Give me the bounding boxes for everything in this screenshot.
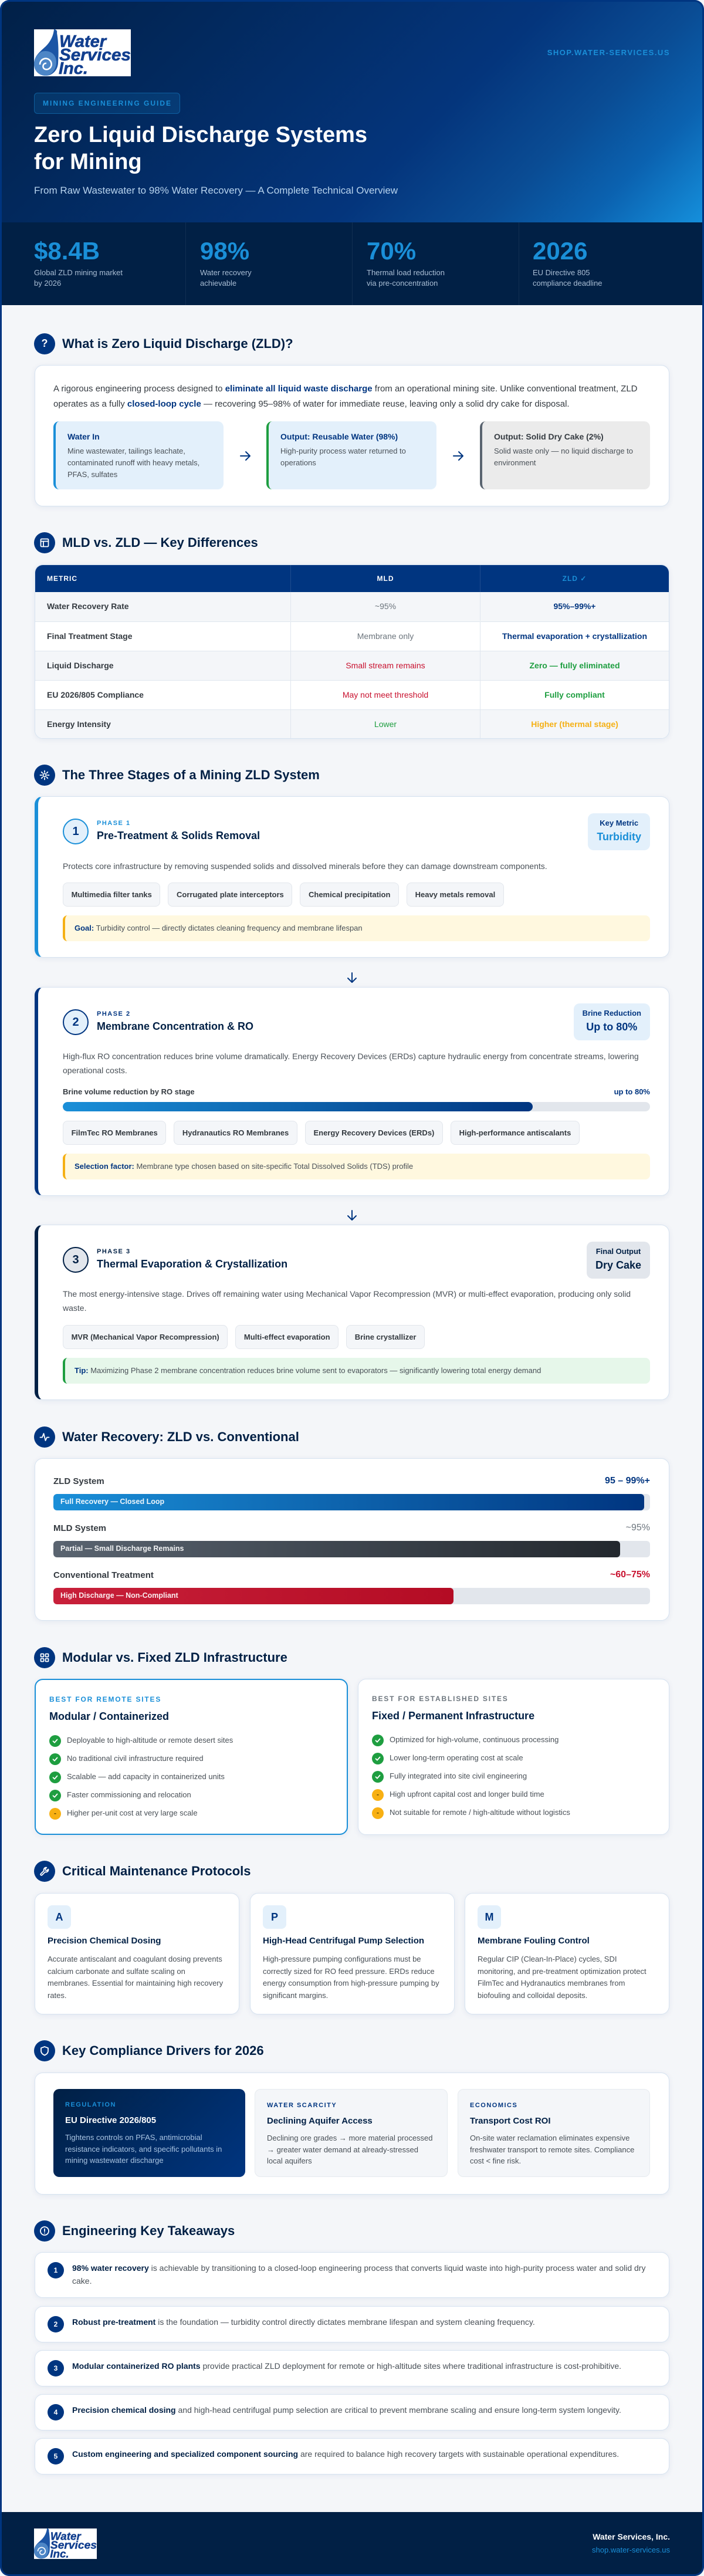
component chips: Multimedia filter tanks	[72, 890, 152, 899]
component chips: FilmTec RO Membranes	[72, 1128, 158, 1137]
key metric	[574, 1003, 650, 1040]
title: Fixed / Permanent Infrastructure	[372, 1710, 534, 1722]
flow: water in: contaminated runoff with heavy metals,	[67, 458, 199, 467]
component chips: Heavy metals removal	[415, 890, 495, 899]
phase label: PHASE 2	[97, 1010, 131, 1017]
footer logo: Water	[50, 2530, 82, 2543]
heading: modular vs fixed: Modular vs. Fixed ZLD Infrastructure	[62, 1650, 287, 1665]
letter badge	[478, 1905, 501, 1929]
row: treatment: Membrane only	[357, 631, 414, 641]
icon: grid	[34, 1647, 55, 1668]
item: Deployable to high-altitude or remote desert sites	[67, 1736, 233, 1745]
takeaway 2: 2	[54, 2320, 57, 2328]
item: Higher per-unit cost at very large scale	[67, 1808, 198, 1817]
component chips: Corrugated plate interceptors	[177, 890, 284, 899]
item	[49, 1735, 233, 1747]
body: membranes. Essential for maintaining high recovery	[48, 1979, 223, 1987]
label: BEST FOR ESTABLISHED SITES	[372, 1695, 509, 1703]
label: BEST FOR REMOTE SITES	[49, 1695, 161, 1703]
goal note: Goal: Turbidity control — directly dictates cleaning frequency and membrane lifespan	[75, 924, 363, 932]
item: Not suitable for remote / high-altitude without logistics	[390, 1808, 570, 1817]
table header: ZLD ✓	[563, 574, 587, 583]
item	[372, 1789, 544, 1801]
driver: scarcity: Declining ore grades → more material processed	[267, 2134, 433, 2142]
site link: SHOP.WATER-SERVICES.US	[547, 48, 670, 57]
row: treatment: Thermal evaporation + crystallization	[502, 631, 647, 641]
icon: shield	[34, 2040, 55, 2061]
selection note	[63, 1154, 650, 1179]
body: monitoring, and pre-treatment optimization protect	[478, 1967, 647, 1976]
row: energy: Energy Intensity	[47, 719, 111, 729]
footer logo	[34, 2528, 97, 2559]
item	[49, 1790, 191, 1801]
item: Fully integrated into site civil engineering	[390, 1772, 527, 1780]
bar: conventional: Conventional Treatment	[53, 1570, 154, 1580]
item	[49, 1753, 204, 1765]
body	[263, 1955, 439, 2000]
key metric: Up to 80%	[586, 1021, 637, 1033]
heading: modular vs fixed	[34, 1647, 287, 1668]
phase number	[63, 1247, 89, 1273]
description	[63, 1289, 631, 1313]
phase title: Thermal Evaporation & Crystallization	[97, 1258, 287, 1270]
letter badge: P	[271, 1911, 278, 1923]
arrow down	[347, 1210, 357, 1221]
goal note	[63, 915, 650, 941]
driver: economics: ECONOMICS	[470, 2102, 517, 2109]
flow: dry cake: Solid waste only — no liquid discharge to	[494, 447, 633, 455]
description: High-flux RO concentration reduces brine volume dramatically. Energy Recovery Devices (ERDs) capture hydraulic energy from concentrate streams, lowering	[63, 1052, 639, 1061]
row: compliance: May not meet threshold	[343, 690, 428, 699]
component chips: High-performance antiscalants	[459, 1128, 571, 1137]
bar: conventional	[53, 1570, 650, 1604]
component chips: Hydranautics RO Membranes	[182, 1128, 289, 1137]
stat: recovery: 98%	[200, 237, 249, 265]
takeaway 1: 1	[54, 2266, 57, 2274]
heading: maintenance: Critical Maintenance Protocols	[62, 1864, 251, 1878]
bar: ZLD	[53, 1476, 650, 1510]
row: treatment: Final Treatment Stage	[47, 631, 132, 641]
component chips: MVR (Mechanical Vapor Recompression)	[72, 1333, 219, 1341]
component chips: Chemical precipitation	[309, 890, 390, 899]
flow: reusable water: operations	[280, 458, 316, 467]
item: Faster commissioning and relocation	[67, 1790, 191, 1799]
panel: compliance drivers	[35, 2073, 669, 2195]
progress label: Brine volume reduction by RO stage	[63, 1087, 195, 1096]
row: treatment	[35, 621, 669, 651]
key metric	[588, 813, 650, 850]
panel: modular	[35, 1679, 348, 1835]
row: discharge	[35, 651, 669, 680]
letter badge	[48, 1905, 71, 1929]
stat: market	[34, 237, 123, 288]
flow: reusable water	[266, 421, 436, 489]
panel: pump selection	[250, 1893, 455, 2014]
item	[49, 1772, 225, 1783]
takeaway 3: Modular containerized RO plants provide practical ZLD deployment for remote or high-altitude sites where traditional infrastructure is cost-prohibitive.	[72, 2361, 621, 2371]
stat: directive: 2026	[533, 237, 587, 265]
driver: regulation: EU Directive 2026/805	[65, 2115, 156, 2125]
description	[63, 1052, 639, 1075]
heading: what is ZLD: What is Zero Liquid Discharge (ZLD)?	[62, 336, 293, 351]
body	[48, 1955, 223, 2000]
row: recovery: 95%–99%+	[553, 601, 596, 611]
panel: chemical dosing	[35, 1893, 239, 2014]
tip note: Tip: Maximizing Phase 2 membrane concentration reduces brine volume sent to evaporators — significantly lowering total energy demand	[75, 1366, 541, 1375]
phase label: PHASE 1	[97, 820, 131, 827]
progress bar	[63, 1102, 650, 1111]
title: for Mining	[34, 150, 142, 174]
footer link: shop.water-services.us	[592, 2545, 670, 2554]
heading: compliance	[34, 2040, 264, 2061]
heading: takeaways	[34, 2220, 235, 2242]
row: discharge: Liquid Discharge	[47, 661, 114, 670]
bar: ZLD: ZLD System	[53, 1476, 104, 1486]
intro text: operates as a fully closed-loop cycle — recovering 95–98% of water for immediate reuse, leaving only a solid dry cake for disposal.	[53, 399, 570, 409]
panel: phase 3	[35, 1225, 669, 1400]
table header	[35, 565, 669, 592]
item: -	[54, 1809, 56, 1817]
phase number	[63, 819, 89, 844]
icon: wrench	[34, 1861, 55, 1882]
stat: market: $8.4B	[34, 237, 100, 265]
flow: dry cake: environment	[494, 458, 536, 467]
panel: fixed	[358, 1679, 669, 1835]
takeaway 5	[35, 2438, 669, 2474]
driver: regulation: Tightens controls on PFAS, antimicrobial	[65, 2133, 202, 2142]
flow: water in: Water In	[67, 432, 100, 441]
stat: thermal: Thermal load reduction	[367, 268, 445, 277]
logo: Services	[59, 46, 131, 65]
heading: three stages	[34, 765, 320, 786]
stat: recovery: Water recovery	[200, 268, 252, 277]
heading: water recovery	[34, 1426, 299, 1448]
key metric: Brine Reduction	[583, 1009, 641, 1017]
driver: scarcity: WATER SCARCITY	[267, 2102, 337, 2109]
icon: gear	[34, 765, 55, 786]
bar: conventional: High Discharge — Non-Compliant	[60, 1591, 178, 1600]
description: The most energy-intensive stage. Drives off remaining water using Mechanical Vapor Recompression (MVR) or multi-effect evaporation, producing only solid	[63, 1289, 631, 1299]
body: High-pressure pumping configurations must be	[263, 1955, 421, 1963]
selection note: Selection factor: Membrane type chosen based on site-specific Total Dissolved Solids (TDS) profile	[75, 1162, 413, 1171]
heading: what is ZLD	[34, 333, 293, 354]
flow: water in: Mine wastewater, tailings leachate,	[67, 447, 185, 455]
description: Protects core infrastructure by removing suspended solids and dissolved minerals before they can damage downstream components.	[63, 861, 547, 871]
phase number	[63, 1009, 89, 1035]
tip note	[63, 1358, 650, 1384]
letter badge	[263, 1905, 286, 1929]
driver: scarcity	[255, 2089, 448, 2177]
stat: directive	[533, 237, 603, 288]
takeaway 3	[35, 2350, 669, 2386]
takeaway 4: Precision chemical dosing and high-head centrifugal pump selection are critical to prevent membrane scaling and ensure long-term system longevity.	[72, 2405, 621, 2415]
icon: question mark	[34, 333, 55, 354]
table header: METRIC	[47, 574, 77, 583]
row: energy: Lower	[374, 719, 397, 729]
takeaway 3: 3	[54, 2364, 57, 2372]
comparison table	[35, 564, 669, 739]
panel: ZLD definition	[35, 365, 669, 506]
phase title: Membrane Concentration & RO	[97, 1020, 253, 1032]
panel: phase 2	[35, 987, 669, 1196]
panel: recovery bars	[35, 1458, 669, 1621]
description: operational costs.	[63, 1066, 127, 1075]
icon: alert circle	[34, 2220, 55, 2242]
logo: Water	[59, 32, 107, 51]
title: High-Head Centrifugal Pump Selection	[263, 1936, 424, 1946]
phase number: 2	[72, 1016, 79, 1029]
takeaway 4: 4	[54, 2408, 57, 2416]
driver: regulation	[53, 2089, 245, 2177]
item: No traditional civil infrastructure required	[67, 1754, 204, 1763]
item	[372, 1753, 523, 1764]
driver: scarcity: → greater water demand at already-stressed	[267, 2145, 418, 2154]
takeaway 2	[35, 2306, 669, 2342]
driver: regulation: mining wastewater discharge	[65, 2156, 164, 2165]
key metric: Final Output	[596, 1247, 641, 1256]
row: recovery: Water Recovery Rate	[47, 601, 129, 611]
heading: compliance: Key Compliance Drivers for 2026	[62, 2043, 264, 2058]
title: Membrane Fouling Control	[478, 1936, 590, 1946]
item: Lower long-term operating cost at scale	[390, 1753, 523, 1762]
takeaway 1: 98% water recovery is achievable by transitioning to a closed-loop engineering process that converts liquid waste into high-purity process water and solid dry	[72, 2263, 645, 2273]
driver: scarcity: Declining Aquifer Access	[267, 2116, 373, 2126]
body	[478, 1955, 647, 2000]
component chips	[63, 1325, 425, 1349]
phase label: PHASE 3	[97, 1248, 131, 1255]
stats bar	[0, 222, 704, 305]
logo	[34, 29, 131, 76]
intro text: A rigorous engineering process designed to eliminate all liquid waste discharge from an operational mining site. Unlike conventional treatment, ZLD	[53, 384, 638, 394]
bar: ZLD: 95 – 99%+	[605, 1476, 650, 1486]
takeaway 5: 5	[54, 2452, 57, 2460]
heading: takeaways: Engineering Key Takeaways	[62, 2223, 235, 2238]
phase title: Pre-Treatment & Solids Removal	[97, 830, 260, 841]
stat: recovery	[200, 237, 252, 288]
driver: regulation: resistance indicators, and specific pollutants in	[65, 2145, 222, 2154]
driver: regulation: REGULATION	[65, 2101, 116, 2108]
driver: economics: cost < fine risk.	[470, 2156, 521, 2165]
row: recovery: ~95%	[375, 601, 396, 611]
takeaway 4	[35, 2394, 669, 2430]
body: rates.	[48, 1991, 67, 2000]
footer logo: Services	[50, 2538, 97, 2551]
row: compliance	[35, 680, 669, 709]
component chips: Energy Recovery Devices (ERDs)	[313, 1128, 434, 1137]
phase number: 1	[72, 825, 79, 838]
body: significant margins.	[263, 1991, 328, 2000]
flow: reusable water: High-purity process water returned to	[280, 447, 406, 455]
item	[372, 1807, 570, 1819]
takeaway 1	[35, 2252, 669, 2298]
component chips: Multi-effect evaporation	[244, 1333, 330, 1341]
row: energy: Higher (thermal stage)	[531, 719, 618, 729]
takeaway 1: cake.	[72, 2276, 92, 2286]
icon: table	[34, 532, 55, 553]
key metric	[587, 1242, 650, 1279]
component chips	[63, 1121, 580, 1145]
bar: conventional: ~60–75%	[610, 1570, 650, 1580]
stat: thermal: via pre-concentration	[367, 279, 438, 288]
body: calcium carbonate and sulfate scaling on	[48, 1967, 185, 1976]
heading: three stages: The Three Stages of a Mining ZLD System	[62, 768, 320, 782]
title: Precision Chemical Dosing	[48, 1936, 161, 1946]
bar: MLD: ~95%	[626, 1523, 650, 1533]
row: compliance: EU 2026/805 Compliance	[47, 690, 144, 699]
item: Scalable — add capacity in containerized units	[67, 1772, 225, 1781]
key metric: Dry Cake	[595, 1259, 641, 1271]
item: -	[377, 1808, 379, 1817]
bar: MLD: Partial — Small Discharge Remains	[60, 1544, 184, 1553]
stat: market: Global ZLD mining market	[34, 268, 123, 277]
body: biofouling and colloidal deposits.	[478, 1991, 587, 2000]
flow: reusable water: Output: Reusable Water (98%)	[280, 432, 398, 441]
stat: directive: EU Directive 805	[533, 268, 590, 277]
body: Accurate antiscalant and coagulant dosing prevents	[48, 1955, 222, 1963]
driver: scarcity: local aquifers	[267, 2156, 312, 2165]
footer	[0, 2512, 704, 2576]
progress value: up to 80%	[614, 1087, 650, 1096]
stat: directive: compliance deadline	[533, 279, 603, 288]
body: FilmTec and Hydranautics membranes from	[478, 1979, 625, 1987]
row: energy	[35, 709, 669, 739]
title: Zero Liquid Discharge Systems	[34, 123, 367, 147]
table header: MLD	[377, 574, 394, 583]
company name: Water Services, Inc.	[593, 2532, 670, 2541]
row: discharge: Small stream remains	[346, 661, 425, 670]
item: Optimized for high-volume, continuous processing	[390, 1735, 559, 1744]
component chips: Brine crystallizer	[355, 1333, 417, 1341]
item: High upfront capital cost and longer build time	[390, 1790, 544, 1799]
body: Regular CIP (Clean-In-Place) cycles, SDI	[478, 1955, 617, 1963]
icon: question mark: ?	[41, 337, 48, 349]
arrow	[453, 451, 463, 461]
item	[49, 1808, 198, 1820]
bar: MLD: MLD System	[53, 1523, 106, 1533]
flow: water in: PFAS, sulfates	[67, 470, 117, 479]
heading: MLD vs ZLD: MLD vs. ZLD — Key Differences	[62, 535, 258, 550]
row: discharge: Zero — fully eliminated	[529, 661, 620, 670]
bar: MLD	[53, 1523, 650, 1557]
panel: fouling control	[465, 1893, 669, 2014]
icon: pulse	[34, 1426, 55, 1448]
heading: water recovery: Water Recovery: ZLD vs. Conventional	[62, 1429, 299, 1444]
driver: economics: freshwater transport to remote sites. Compliance	[470, 2145, 634, 2154]
flow: dry cake	[480, 421, 650, 489]
badge	[34, 93, 180, 114]
item	[372, 1735, 559, 1746]
letter badge: A	[55, 1911, 63, 1923]
arrow down	[347, 972, 357, 983]
key metric: Key Metric	[600, 819, 638, 827]
subtitle: From Raw Wastewater to 98% Water Recovery — A Complete Technical Overview	[34, 185, 398, 196]
title: Modular / Containerized	[49, 1710, 169, 1722]
key metric: Turbidity	[597, 831, 641, 843]
driver: economics	[458, 2089, 650, 2177]
item	[372, 1771, 527, 1783]
body: energy consumption from high-pressure pumping by	[263, 1979, 439, 1987]
body: correctly sized for RO feed pressure. ERDs reduce	[263, 1967, 435, 1976]
item: -	[377, 1790, 379, 1799]
row: compliance: Fully compliant	[544, 690, 605, 699]
flow: dry cake: Output: Solid Dry Cake (2%)	[494, 432, 604, 441]
stat: recovery: achievable	[200, 279, 236, 288]
stat: market: by 2026	[34, 279, 61, 288]
driver: economics: Transport Cost ROI	[470, 2116, 551, 2126]
intro text	[53, 384, 638, 409]
header banner	[0, 0, 704, 222]
takeaway 5: Custom engineering and specialized component sourcing are required to balance high recovery targets with sustainable operational expenditures.	[72, 2449, 619, 2459]
flow: water in	[53, 421, 224, 489]
stat: thermal: 70%	[367, 237, 416, 265]
arrow	[240, 451, 251, 461]
title	[34, 123, 367, 174]
phase number: 3	[72, 1253, 79, 1266]
description: waste.	[63, 1303, 86, 1313]
panel: phase 1	[35, 796, 669, 958]
row: recovery	[35, 592, 669, 621]
driver: economics: On-site water reclamation eliminates expensive	[470, 2134, 629, 2142]
heading: maintenance	[34, 1861, 251, 1882]
heading: MLD vs ZLD	[34, 532, 258, 553]
bar: ZLD: Full Recovery — Closed Loop	[60, 1497, 164, 1506]
component chips	[63, 883, 504, 907]
stat: thermal	[367, 237, 445, 288]
letter badge: M	[485, 1911, 494, 1923]
badge: MINING ENGINEERING GUIDE	[43, 99, 172, 107]
takeaway 2: Robust pre-treatment is the foundation — turbidity control directly dictates membrane lifespan and system cleaning frequency.	[72, 2317, 535, 2327]
